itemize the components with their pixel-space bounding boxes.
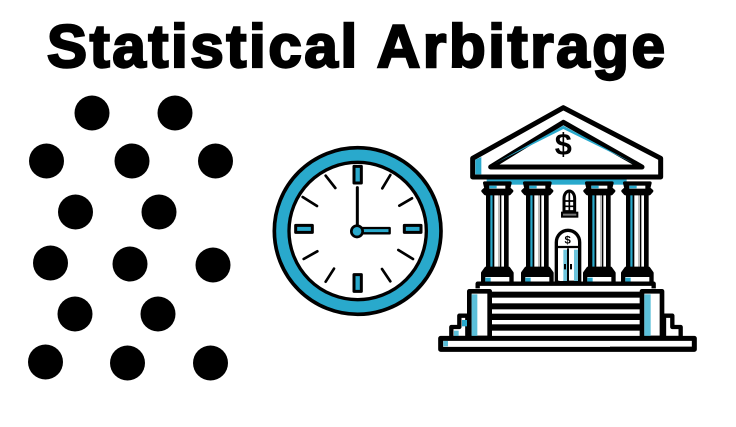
right pier — [642, 291, 662, 338]
left pier — [469, 291, 490, 338]
blue soffit — [487, 178, 627, 185]
door — [556, 230, 580, 282]
steps — [441, 284, 694, 349]
right side steps — [664, 316, 681, 338]
pediment roof — [473, 108, 661, 177]
base plinth — [441, 338, 694, 349]
icon: bank building — [441, 108, 694, 349]
window — [562, 191, 577, 217]
icon: clock — [274, 148, 441, 314]
door: $ — [565, 235, 572, 247]
left side steps — [451, 316, 467, 338]
columns — [483, 183, 512, 284]
title: Statistical Arbitrage — [47, 13, 665, 80]
building facade — [510, 177, 625, 283]
dollar sign: $ — [555, 127, 572, 161]
dot pattern — [28, 96, 233, 380]
